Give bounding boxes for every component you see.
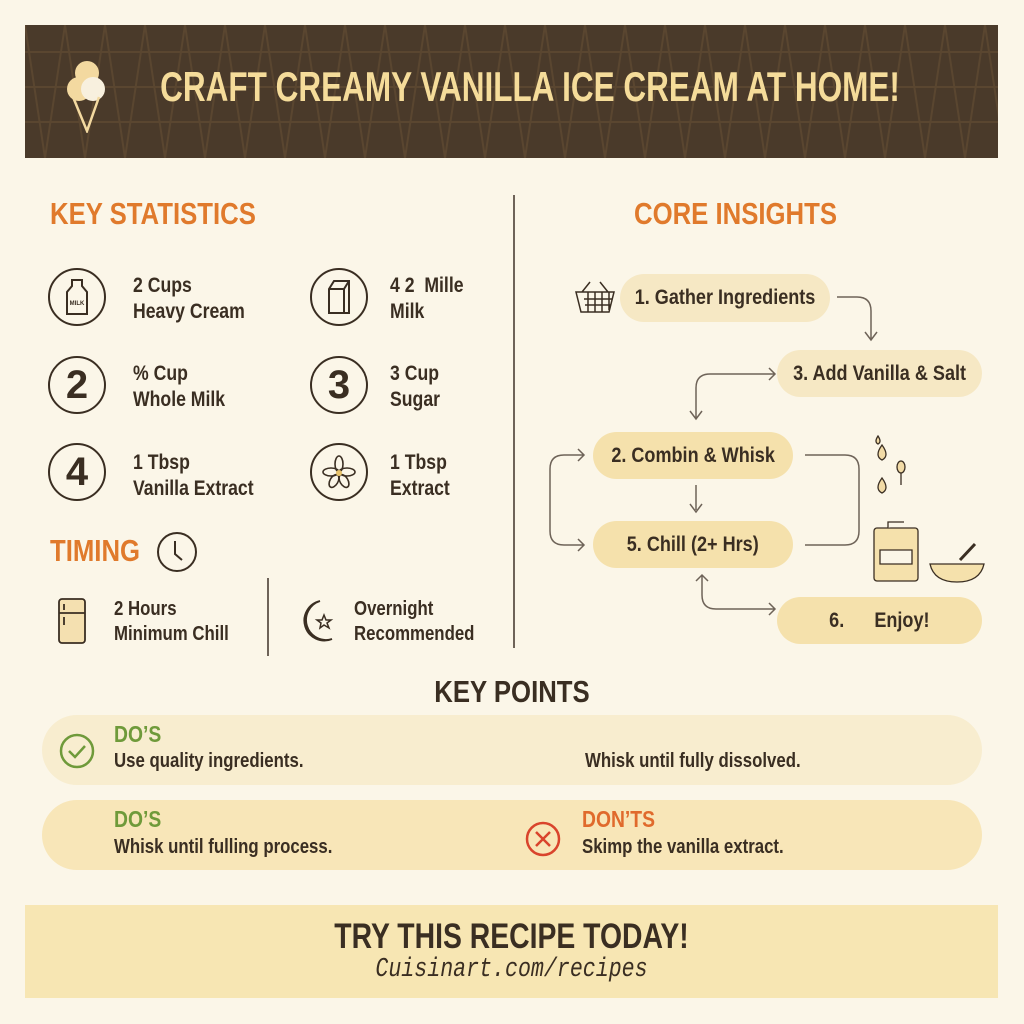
stat: vanilla extract: 1 Tbsp xyxy=(133,451,190,474)
panel: do's row 1: Use quality ingredients. xyxy=(114,750,304,772)
icon: cross xyxy=(526,822,560,856)
icon: ice cream cone xyxy=(67,61,105,133)
step 6 xyxy=(777,597,982,644)
step 5: 5. Chill (2+ Hrs) xyxy=(627,532,759,556)
step 3: 3. Add Vanilla & Salt xyxy=(793,362,966,384)
stat: heavy cream xyxy=(133,274,245,323)
icon: number 2: 2 xyxy=(66,362,88,406)
stat: heavy cream: Heavy Cream xyxy=(133,300,245,323)
heading: key points: KEY POINTS xyxy=(434,674,590,709)
icon: drops and whisk xyxy=(876,436,905,493)
icon: machine and bowl xyxy=(874,522,984,582)
heading: core insights: CORE INSIGHTS xyxy=(634,196,837,231)
icon: number 2 xyxy=(48,356,106,414)
icon: basket xyxy=(576,282,614,312)
stat: heavy cream: 2 Cups xyxy=(133,274,192,297)
icon: clock xyxy=(157,532,197,572)
icon: milk bottle xyxy=(48,268,106,326)
stat: milk xyxy=(390,274,464,323)
step 2: 2. Combin & Whisk xyxy=(611,444,775,466)
icon: carton xyxy=(310,268,368,326)
stat: vanilla extract: Vanilla Extract xyxy=(133,477,254,500)
flowchart: core insights xyxy=(549,274,985,644)
timing: overnight xyxy=(303,598,474,645)
title: CRAFT CREAMY VANILLA ICE CREAM AT HOME! xyxy=(160,63,900,110)
step 1 xyxy=(620,274,830,322)
icon: moon xyxy=(303,600,334,642)
panel: do's row 1: Whisk until fully dissolved. xyxy=(585,750,801,772)
panel: do's and don'ts row 2: Whisk until fulling process. xyxy=(114,836,332,858)
stat: whole milk xyxy=(133,362,225,411)
stat: sugar: Sugar xyxy=(390,388,440,411)
step 3 xyxy=(777,350,982,397)
stat: sugar: 3 Cup xyxy=(390,362,439,385)
icon: number 4 xyxy=(48,443,106,501)
stat: milk: Milk xyxy=(390,300,424,323)
stat: extract: Extract xyxy=(390,477,450,500)
timing: minimum chill: Minimum Chill xyxy=(114,623,229,645)
stat: extract: 1 Tbsp xyxy=(390,451,447,474)
icon: number 4: 4 xyxy=(66,450,88,494)
heading: key statistics: KEY STATISTICS xyxy=(50,196,256,231)
stat: whole milk: % Cup xyxy=(133,362,188,385)
panel: do's row 1 xyxy=(42,715,982,785)
panel: do's and don'ts row 2: DON’TS xyxy=(582,806,655,832)
heading: timing: TIMING xyxy=(50,533,140,568)
icon: vanilla flower xyxy=(310,443,368,501)
header banner xyxy=(25,25,998,158)
icon: number 3 xyxy=(310,356,368,414)
icon: check xyxy=(60,734,94,768)
panel: do's and don'ts row 2: DO’S xyxy=(114,806,161,832)
step 5 xyxy=(593,521,793,568)
icon: milk bottle: MILK xyxy=(70,301,85,307)
stat: extract xyxy=(390,451,450,500)
icon: fridge xyxy=(58,598,86,644)
panel: do's and don'ts row 2 xyxy=(42,800,982,870)
panel: do's row 1: DO’S xyxy=(114,721,161,747)
stat: vanilla extract xyxy=(133,451,254,500)
step 1: 1. Gather Ingredients xyxy=(635,286,815,309)
timing: overnight: Overnight xyxy=(354,598,433,620)
timing: minimum chill: 2 Hours xyxy=(114,598,177,620)
step 2 xyxy=(593,432,793,479)
stat: sugar xyxy=(390,362,440,411)
stat: whole milk: Whole Milk xyxy=(133,388,225,411)
footer call to action: Cuisinart.com/recipes xyxy=(375,955,648,985)
step 6: 6. Enjoy! xyxy=(829,608,930,632)
stat: milk: 4 2 Mille xyxy=(390,274,464,297)
icon: number 3: 3 xyxy=(328,362,350,406)
footer call to action xyxy=(25,905,998,998)
footer call to action: TRY THIS RECIPE TODAY! xyxy=(334,917,689,956)
panel: key statistics xyxy=(48,268,464,501)
timing: overnight: Recommended xyxy=(354,623,474,645)
panel: do's and don'ts row 2: Skimp the vanilla extract. xyxy=(582,836,784,858)
timing: minimum chill xyxy=(58,598,229,645)
